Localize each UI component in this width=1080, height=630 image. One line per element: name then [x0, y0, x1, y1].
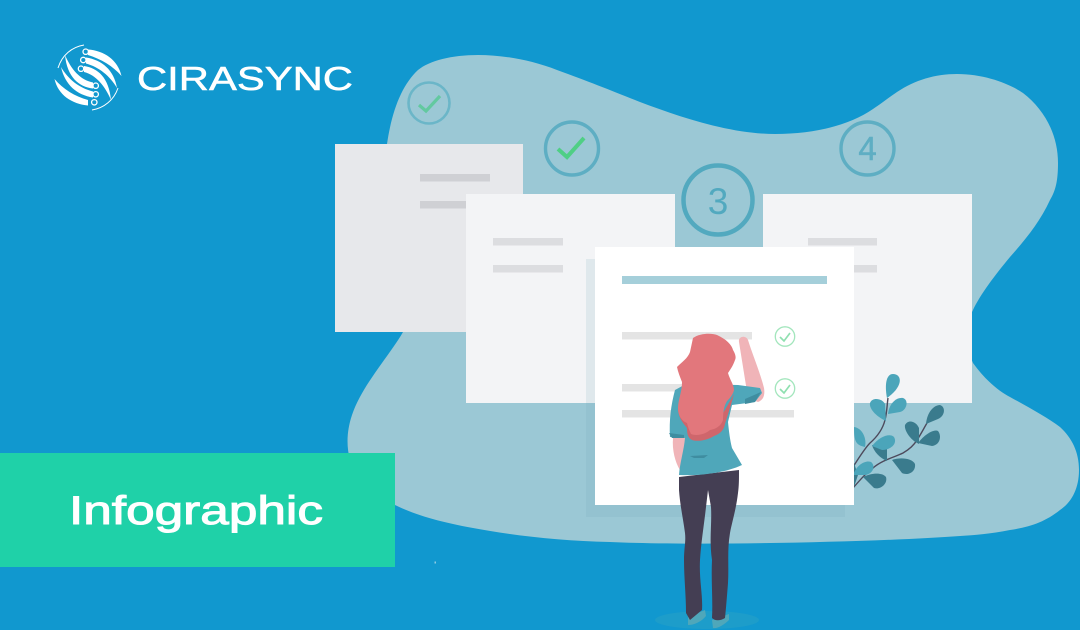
- shoes: [688, 610, 706, 625]
- badge: number 3: [684, 166, 752, 234]
- document shadow: [586, 259, 845, 517]
- document card: back right: [763, 194, 972, 403]
- small speck: [434, 562, 436, 564]
- raised arm: [739, 337, 764, 402]
- badge: number 4: 4: [858, 130, 877, 167]
- badge: check 1: [408, 82, 450, 124]
- document card: middle: [466, 194, 675, 403]
- logo wordmark: CIRASYNC: [137, 60, 353, 97]
- badge: number 4: [841, 122, 894, 175]
- trousers: [679, 470, 739, 620]
- badge: check 2: [546, 122, 598, 175]
- logo: [54, 45, 353, 110]
- shirt: [670, 384, 762, 475]
- banner text: Infographic: [69, 489, 323, 533]
- label banner: [0, 453, 395, 567]
- lower arm: [673, 438, 686, 470]
- person: [655, 334, 764, 629]
- hair: [677, 334, 736, 435]
- document card: front checklist: [595, 247, 854, 505]
- badge: number 3: 3: [708, 181, 728, 222]
- hair shadow: [678, 394, 734, 441]
- background blob: [348, 55, 1079, 544]
- checklist heading bar: [622, 276, 827, 284]
- document card: back left: [335, 144, 523, 332]
- plant: [853, 374, 944, 488]
- logo mark: [54, 45, 122, 110]
